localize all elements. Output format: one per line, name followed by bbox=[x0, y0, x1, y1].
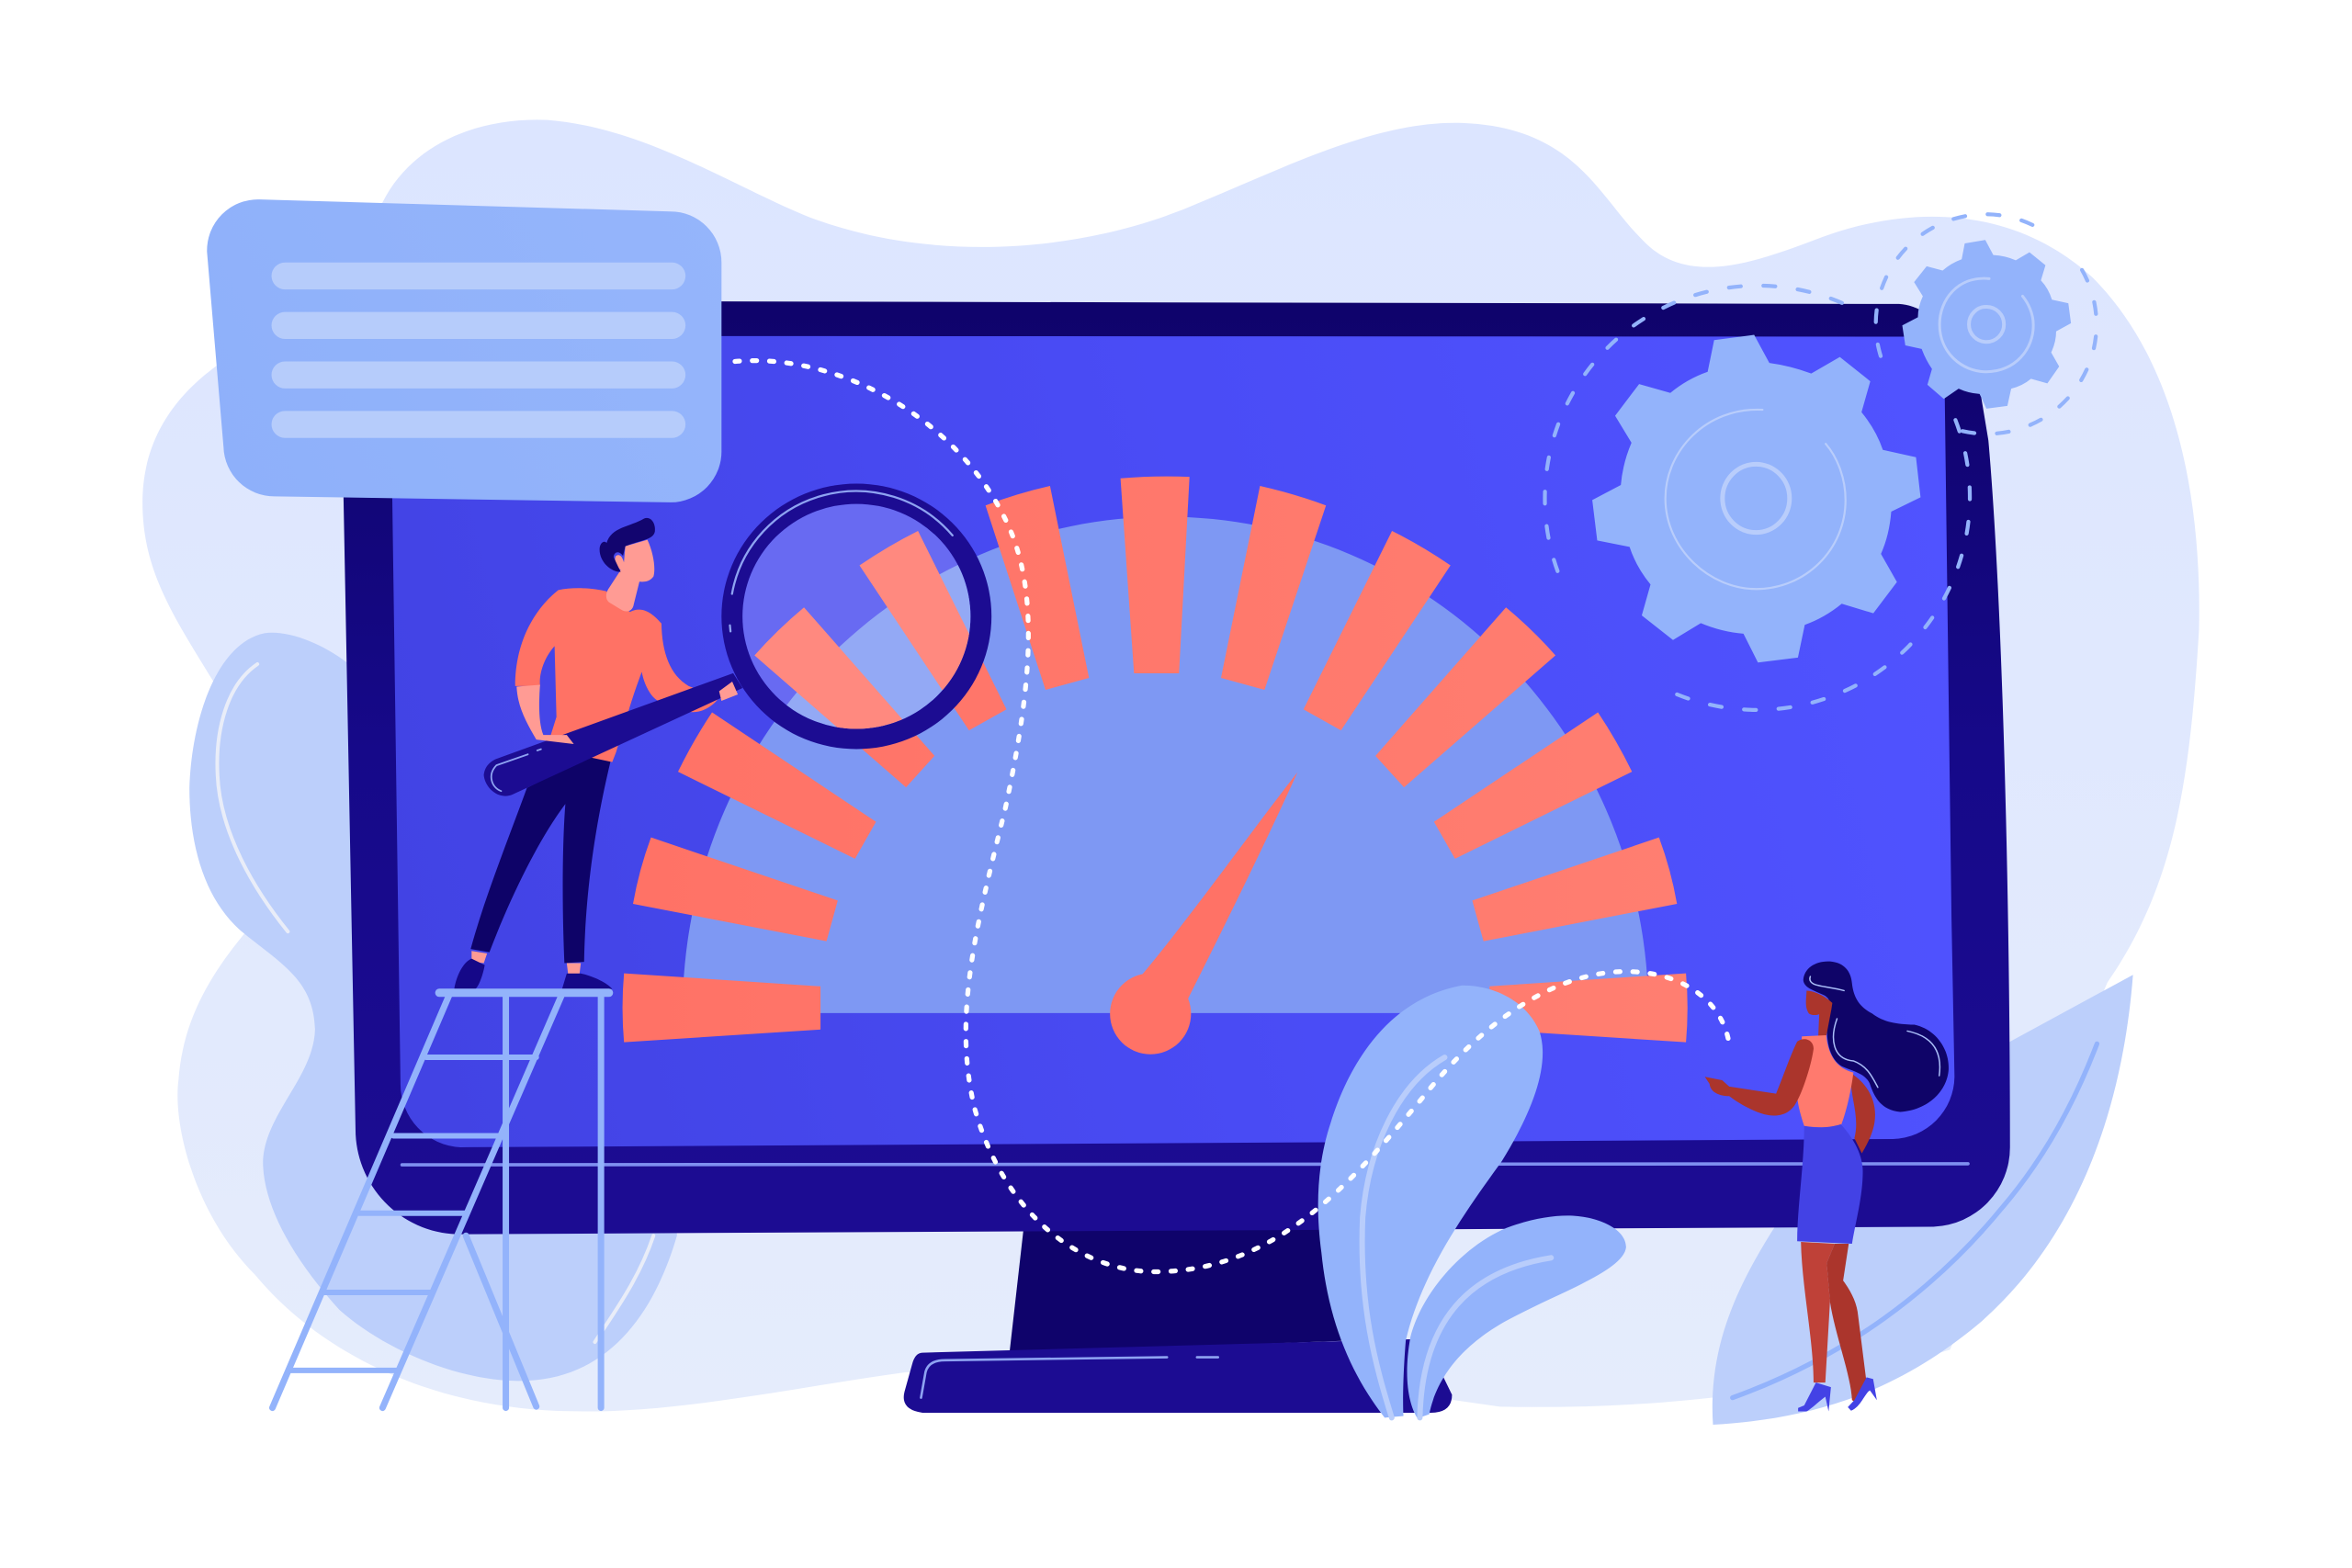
woman hair bbox=[1804, 962, 1949, 1111]
woman face and neck bbox=[1806, 990, 1832, 1036]
man neck and face bbox=[606, 540, 654, 612]
ladder bbox=[272, 993, 609, 1408]
right background leaf bbox=[1713, 975, 2133, 1425]
man on ladder bbox=[454, 518, 742, 989]
woman top bbox=[1797, 1035, 1853, 1127]
background blob bbox=[142, 119, 2199, 1412]
woman back arm bbox=[1850, 1073, 1875, 1154]
man hair bbox=[600, 518, 655, 572]
dashed gear orbits bbox=[1544, 214, 2097, 710]
foreground plant bbox=[1318, 986, 1626, 1418]
left background leaf bbox=[189, 633, 677, 1381]
magnifying glass bbox=[721, 483, 992, 750]
woman bbox=[1705, 962, 1949, 1412]
note panel bbox=[207, 199, 721, 502]
gauge needle bbox=[1110, 773, 1297, 1055]
woman pointing arm bbox=[1705, 1039, 1814, 1115]
woman shoes bbox=[1798, 1377, 1877, 1412]
woman legs bbox=[1801, 1242, 1835, 1382]
man ankles bbox=[471, 951, 581, 975]
man trousers bbox=[470, 746, 610, 964]
dotted white path bbox=[735, 361, 1729, 1271]
magnifier lens view bbox=[742, 503, 970, 729]
man sweater bbox=[515, 588, 719, 762]
man shoes bbox=[454, 959, 612, 989]
man hands bbox=[516, 682, 738, 744]
magnifier handle bbox=[484, 673, 742, 796]
gauge ticks bbox=[623, 477, 1688, 1043]
monitor stand bbox=[904, 1207, 1452, 1413]
gauge dial bbox=[683, 516, 1648, 1013]
note text lines bbox=[272, 263, 685, 438]
monitor base line bbox=[402, 1164, 1968, 1165]
small gear bbox=[1902, 240, 2071, 409]
monitor screen bbox=[390, 336, 1954, 1147]
large gear bbox=[1592, 335, 1920, 662]
woman skirt bbox=[1797, 1124, 1863, 1244]
monitor bezel bbox=[344, 301, 2010, 1235]
